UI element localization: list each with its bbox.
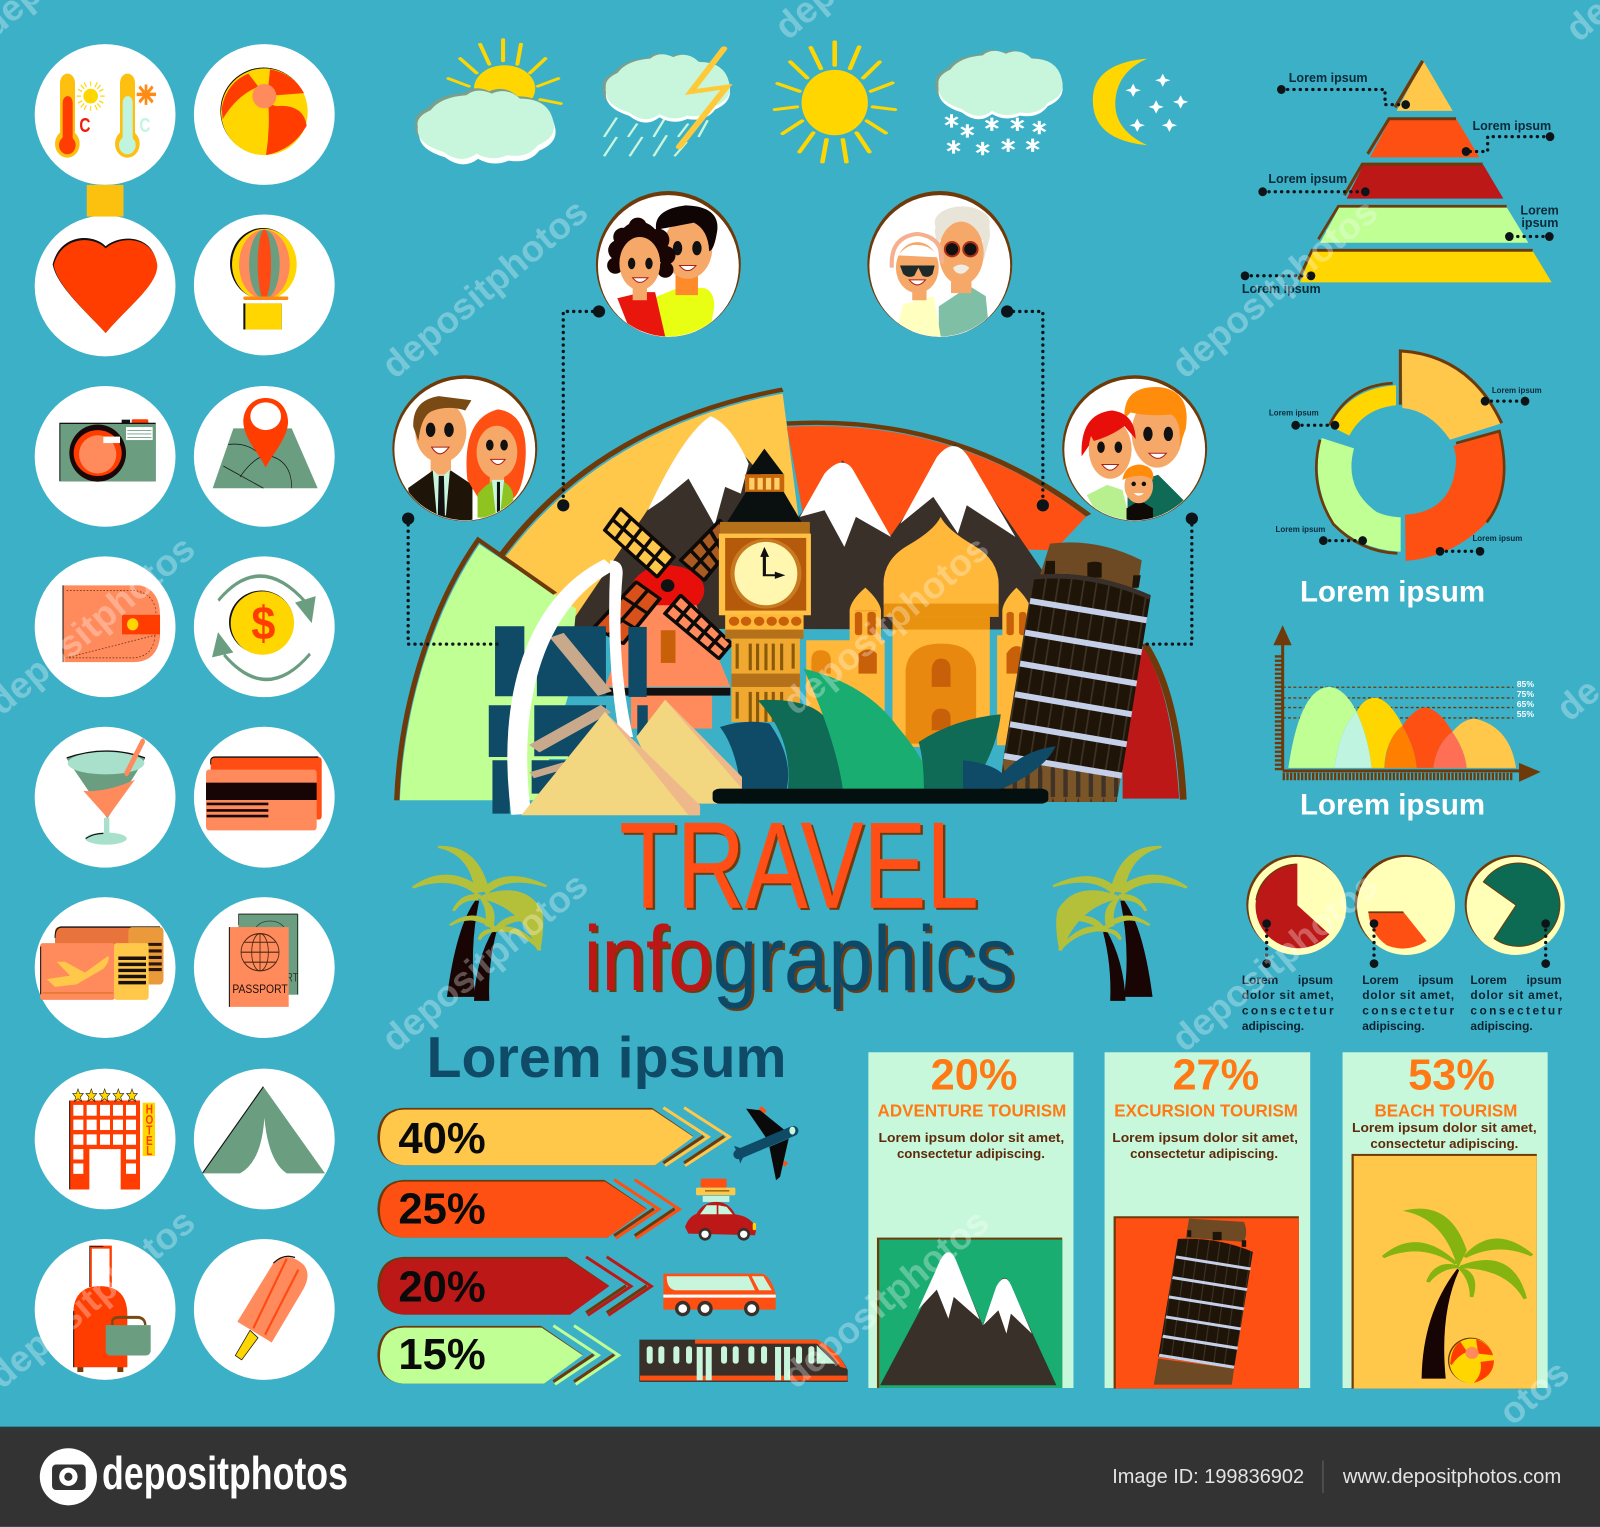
- watermarks: otos: [1491, 1352, 1577, 1433]
- title: TRAVEL: TRAVEL: [619, 796, 979, 933]
- level labels: 55%: [1517, 709, 1534, 719]
- transport bars: [377, 1108, 848, 1384]
- icon: currency exchange: [212, 576, 316, 679]
- pie text column 3: dolor sit amet,: [1470, 988, 1562, 1002]
- area chart: [1273, 625, 1541, 782]
- icon: ice lolly: [235, 1256, 308, 1360]
- percentages: 15%: [398, 1330, 486, 1379]
- windmill blades: [594, 509, 731, 659]
- dotted connector: couple to hero: [557, 305, 605, 511]
- segment: yellow arc: [501, 390, 798, 627]
- icon: hotel: E: [146, 1134, 153, 1148]
- footer bar: [0, 1427, 1600, 1527]
- card: beach tourism: BEACH TOURISM: [1374, 1101, 1517, 1121]
- dotted connector: family to hero: [1147, 512, 1198, 644]
- segment: green arc: [397, 540, 576, 800]
- bar 15 percent: [377, 1326, 619, 1384]
- dotted connector: business couple to hero: [402, 512, 500, 644]
- opera house base: [713, 789, 1048, 804]
- donut labels: Lorem ipsum: [1492, 386, 1542, 395]
- portrait: seniors: [867, 191, 1012, 337]
- card: beach tourism: [1343, 1052, 1548, 1389]
- card: adventure tourism: Lorem ipsum dolor sit amet,: [879, 1130, 1064, 1145]
- icon: camera: [59, 419, 156, 482]
- icon: passports: RT: [286, 971, 299, 985]
- watermarks: depositphotos: [775, 1201, 996, 1396]
- level labels: 85%: [1517, 679, 1534, 689]
- donut segments: [1291, 351, 1529, 561]
- card image: mountains: [877, 1238, 1062, 1388]
- level labels: [1517, 679, 1534, 719]
- landmark: taj mahal: [806, 517, 1031, 747]
- landmark: big ben: [719, 449, 811, 722]
- icon: hotel: L: [146, 1144, 152, 1159]
- percentages: [398, 1114, 486, 1379]
- card: adventure tourism: consectetur adipiscing.: [897, 1146, 1045, 1161]
- icon: palm trees left: [413, 847, 546, 1001]
- icon: currency exchange: $: [251, 597, 276, 651]
- footer logo: depositphotos: [102, 1447, 348, 1499]
- icon: hotel: O: [145, 1113, 153, 1127]
- beach ball: [1448, 1338, 1494, 1383]
- pyramid labels: Lorem ipsum: [1242, 282, 1321, 296]
- percentages: 25%: [398, 1185, 486, 1234]
- landmark: sydney opera house: [720, 669, 934, 789]
- footer image id: Image ID: 199836902: [1112, 1466, 1304, 1488]
- pie connectors: [1262, 919, 1550, 968]
- dashed level lines: [1283, 687, 1513, 718]
- dotted connector: seniors to hero: [1001, 305, 1049, 511]
- pie text column 1: adipiscing.: [1242, 1019, 1304, 1033]
- icon: heart: [53, 238, 157, 333]
- icon: passports: [229, 914, 299, 1007]
- lower icons: [40, 741, 325, 1372]
- pyramid chart: [1241, 61, 1559, 296]
- pie text column 3: Lorem ipsum: [1470, 973, 1562, 987]
- segment: orange arc: [787, 423, 1089, 550]
- portrait: young couple: [596, 191, 741, 337]
- card image: tower: [1114, 1216, 1299, 1389]
- watermarks: depositphotos: [1163, 191, 1385, 386]
- footer logo: [40, 1447, 348, 1505]
- heading: chart title 1: Lorem ipsum: [1300, 575, 1485, 608]
- title: infographics: infographics: [584, 908, 1015, 1010]
- pie text column 3: [1470, 973, 1563, 1033]
- card: adventure tourism: [868, 1052, 1073, 1388]
- pie text column 3: consectetur: [1470, 1004, 1563, 1018]
- icon: map pin: [213, 398, 318, 488]
- hero: half-circle world landmarks: [397, 390, 1183, 815]
- icon: hotel: T: [146, 1123, 152, 1138]
- segment: dark red arc: [1123, 644, 1183, 800]
- icon: bank cards: [206, 757, 322, 830]
- landmark: leaning tower of pisa: [999, 542, 1151, 802]
- icon: palm trees right: [1053, 847, 1187, 1001]
- icon: thermometers: C: [139, 114, 151, 137]
- percentages: 20%: [398, 1262, 486, 1311]
- watermarks: depositphotos: [775, 527, 996, 723]
- donut chart: [1269, 351, 1542, 561]
- upper icons: [53, 68, 318, 679]
- icon: wallet: [63, 585, 160, 662]
- axes: [1273, 625, 1541, 782]
- yellow connector block: [87, 185, 123, 217]
- heading: chart title 2: Lorem ipsum: [1300, 789, 1485, 822]
- icon: hotel: [69, 1089, 155, 1189]
- card: excursion tourism: EXCURSION TOURISM: [1114, 1101, 1298, 1121]
- percentages: 40%: [398, 1114, 486, 1163]
- icon: hotel: H: [146, 1102, 153, 1117]
- card: adventure tourism: ADVENTURE TOURISM: [878, 1101, 1066, 1121]
- icon: thermometers: C: [79, 114, 91, 137]
- bar 20 percent: [377, 1257, 651, 1315]
- card image: palm and ball: [1352, 1154, 1537, 1389]
- icon: beach ball: [220, 68, 308, 155]
- mountains: [567, 416, 1047, 630]
- level labels: 75%: [1517, 689, 1534, 699]
- footer url: www.depositphotos.com: [1342, 1466, 1561, 1488]
- icon: train: [639, 1340, 848, 1382]
- card: excursion tourism: [1105, 1052, 1310, 1389]
- card: excursion tourism: 27%: [1172, 1052, 1259, 1100]
- pyramid labels: Lorem: [1520, 204, 1559, 218]
- pie text column 2: Lorem ipsum: [1362, 973, 1453, 987]
- watermarks: depositphotos: [374, 191, 595, 386]
- icon: airplane: [734, 1108, 795, 1180]
- card: beach tourism: 53%: [1408, 1052, 1495, 1100]
- tourism cards: [868, 1052, 1548, 1389]
- pyramid labels: Lorem ipsum: [1268, 172, 1347, 186]
- pie text column 3: adipiscing.: [1470, 1019, 1533, 1033]
- icon: hot air balloon: [230, 228, 297, 329]
- icon column: white circle travel icons: [35, 44, 335, 1380]
- card: excursion tourism: Lorem ipsum dolor sit amet,: [1112, 1130, 1298, 1145]
- donut labels: [1269, 386, 1542, 543]
- icon: car with luggage: [685, 1179, 756, 1241]
- pie text column 2: adipiscing.: [1362, 1019, 1425, 1033]
- pyramid labels: [1242, 71, 1559, 296]
- icon: snow cloud: [935, 50, 1063, 155]
- pie text column 1: dolor sit amet,: [1242, 988, 1334, 1002]
- pie text column 1: [1242, 973, 1334, 1033]
- pie text column 1: consectetur: [1242, 1004, 1334, 1018]
- pie 3: [1465, 855, 1565, 955]
- card: excursion tourism: consectetur adipiscing.: [1130, 1146, 1278, 1161]
- icon: bus: [663, 1274, 776, 1316]
- icon: luggage: [73, 1246, 151, 1372]
- watermarks: depositphotos: [374, 864, 595, 1059]
- portrait: business couple: [392, 375, 537, 523]
- pie text column 2: [1362, 973, 1454, 1033]
- pyramid labels: ipsum: [1521, 216, 1558, 230]
- pyramid labels: Lorem ipsum: [1472, 119, 1551, 133]
- icon: passports: PASSPORT: [232, 983, 288, 996]
- landmark: windmill: [594, 509, 731, 729]
- bar 40 percent: [377, 1108, 729, 1166]
- icon: cocktail: [67, 741, 145, 845]
- heading: transport share: Lorem ipsum: [427, 1026, 786, 1090]
- icon circles: [35, 44, 335, 1380]
- landmark: pyramids: [521, 700, 742, 815]
- bar 25 percent: [377, 1180, 679, 1238]
- portrait: family: [1062, 375, 1207, 523]
- landmark: london eye with union flag: [489, 560, 648, 814]
- watermarks: depositphotos: [1163, 864, 1385, 1059]
- donut labels: Lorem ipsum: [1276, 525, 1325, 534]
- overlapping humps: [1288, 687, 1516, 768]
- donut labels: Lorem ipsum: [1269, 409, 1319, 418]
- level labels: 65%: [1517, 699, 1534, 709]
- donut labels: Lorem ipsum: [1472, 534, 1522, 543]
- pyramid layers: [1241, 61, 1554, 282]
- card: beach tourism: consectetur adipiscing.: [1370, 1136, 1518, 1151]
- card: adventure tourism: 20%: [931, 1052, 1017, 1100]
- pie text column 2: consectetur: [1362, 1004, 1454, 1018]
- card: beach tourism: Lorem ipsum dolor sit amet,: [1352, 1120, 1537, 1135]
- icon: sun: [775, 42, 895, 162]
- icon: tent: [203, 1087, 325, 1173]
- icon: thermometers: [55, 74, 156, 158]
- pie text column 2: dolor sit amet,: [1362, 988, 1454, 1002]
- pie 1: [1246, 855, 1346, 955]
- icon: storm cloud with lightning and rain: [603, 49, 730, 156]
- pie 2: [1355, 855, 1455, 955]
- icon: moon and stars: [1093, 59, 1188, 145]
- pie indicators: [1242, 855, 1565, 1033]
- icon: plane tickets: [40, 927, 163, 1000]
- opera house front shells: [919, 714, 1056, 789]
- pie text column 1: Lorem ipsum: [1242, 973, 1333, 987]
- pyramid labels: Lorem ipsum: [1289, 71, 1368, 85]
- weather icons row: [415, 40, 1188, 164]
- icon: sun behind cloud: [415, 40, 561, 164]
